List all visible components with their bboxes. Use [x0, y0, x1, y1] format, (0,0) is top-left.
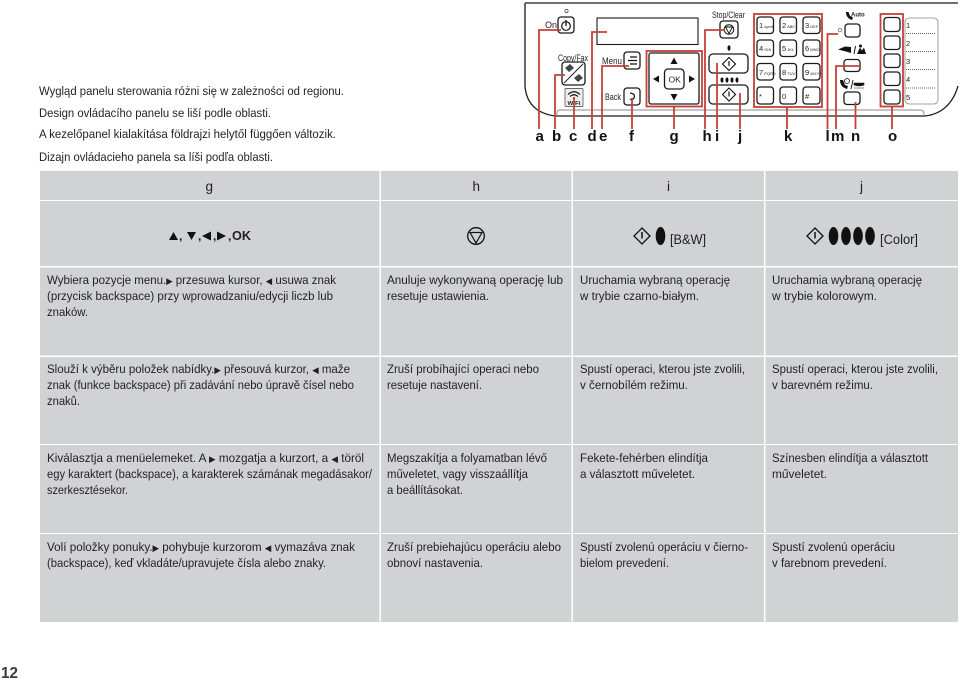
numeric keypad: 0: [782, 92, 786, 101]
Slovak descriptions: Spustí zvolenú operáciu v čierno-: [580, 540, 748, 554]
one-touch buttons and list: 4: [906, 75, 910, 84]
callout letters: c: [569, 128, 577, 145]
callout letters: i: [715, 128, 719, 145]
Hungarian descriptions: Színesben elindítja a választott: [772, 451, 929, 465]
wifi icon: WiFi: [568, 101, 581, 107]
control panel diagram: [525, 3, 958, 145]
numeric keypad: #: [805, 92, 810, 101]
Polish descriptions: Uruchamia wybraną operację: [772, 273, 922, 287]
red callout lines: [539, 14, 903, 129]
Polish descriptions: w trybie kolorowym.: [771, 289, 877, 303]
Slovak descriptions: (backspace), keď vkladáte/upravujete čísla alebo znaky.: [47, 556, 326, 570]
wifi icon: [565, 88, 583, 107]
numeric keypad: 4 GHI: [759, 44, 771, 53]
intro text: regional panel note: Wygląd panelu sterowania różni się w zależności od regionu.: [39, 84, 344, 98]
symbols: navigation keys: OK: [232, 228, 252, 243]
numeric keypad: 2 ABC: [782, 21, 795, 30]
numeric keypad: 6 MNO: [805, 44, 820, 53]
Polish descriptions: znaków.: [47, 305, 88, 319]
Polish descriptions: (przycisk backspace) przy wprowadzaniu/edycji liczb lub: [47, 289, 333, 303]
numeric keypad: *: [759, 92, 762, 101]
stop/clear button: [712, 10, 745, 38]
symbol: start color: [Color]: [880, 232, 918, 247]
callout letters: n: [851, 128, 860, 145]
numeric keypad: 3 DEF: [805, 21, 819, 30]
Slovak descriptions: obnoví nastavenia.: [387, 556, 483, 570]
start color button: [709, 77, 748, 104]
Czech descriptions: v černobílém režimu.: [580, 378, 688, 392]
numeric keypad: 1 symb: [759, 21, 775, 30]
Czech descriptions: resetuje nastavení.: [387, 378, 482, 392]
navigation pad: [649, 53, 699, 104]
Czech descriptions: v barevném režimu.: [772, 378, 873, 392]
Czech descriptions: Zruší probíhající operaci nebo: [387, 362, 539, 376]
callout letters: l: [826, 128, 830, 145]
callout letters: e: [599, 128, 607, 145]
callout letters: a: [536, 128, 544, 145]
Czech descriptions: Slouží k výběru položek nabídky.▶ přesouvá kurzor, ◀ maže: [47, 362, 350, 376]
table column headings: j: [859, 179, 863, 194]
Czech descriptions: znak (funkce backspace) při zadávání nebo úpravě čísel nebo: [47, 378, 354, 392]
numeric keypad: 9 WXYZ: [805, 68, 822, 77]
numeric keypad: 7 PQRS: [759, 68, 776, 77]
table column headings: i: [667, 179, 670, 194]
back button: Back: [605, 92, 621, 102]
one-touch buttons and list: 1: [906, 21, 910, 30]
symbols: navigation keys: [169, 228, 252, 243]
callout letters: h: [702, 128, 712, 145]
numeric keypad: 8 TUV: [782, 68, 796, 77]
menu button: [602, 52, 640, 69]
numeric keypad: 5 JKL: [782, 44, 795, 53]
intro text: regional panel note: [39, 84, 344, 164]
Hungarian descriptions: Fekete-fehérben elindítja: [580, 451, 708, 465]
back button: [605, 88, 640, 105]
auto answer button: Auto: [851, 12, 865, 18]
one-touch buttons and list: 2: [906, 39, 910, 48]
panel outline: [525, 3, 958, 116]
table column headings: g: [206, 179, 213, 194]
callout letters: d: [588, 128, 597, 145]
symbol: start B&W: [B&W]: [670, 232, 706, 247]
Hungarian descriptions: szerkesztésekor.: [47, 483, 128, 497]
fax/contacts button: [838, 44, 866, 72]
callout letters: m: [831, 128, 844, 145]
symbol: stop: [468, 228, 484, 244]
panel inner ledge: [557, 110, 924, 115]
Polish descriptions: w trybie czarno-białym.: [579, 289, 699, 303]
Hungarian descriptions: Kiválasztja a menüelemeket. A ▶ mozgatja a kurzort, a ◀ töröl: [47, 451, 364, 465]
Slovak descriptions: bielom prevedení.: [580, 556, 669, 570]
Slovak descriptions: Spustí zvolenú operáciu: [772, 540, 895, 554]
stop/clear button: Stop/Clear: [712, 10, 745, 20]
table column headings: [206, 179, 863, 194]
Hungarian descriptions: Megszakítja a folyamatban lévő: [387, 451, 547, 465]
callout letters: b: [552, 128, 561, 145]
intro text: regional panel note: Dizajn ovládacieho panela sa líši podľa oblasti.: [39, 150, 273, 164]
Hungarian descriptions: [47, 451, 929, 497]
Slovak descriptions: Zruší prebiehajúcu operáciu alebo: [387, 540, 561, 554]
Polish descriptions: [47, 273, 922, 319]
Polish descriptions: resetuje ustawienia.: [387, 289, 489, 303]
auto answer button: [838, 12, 865, 37]
symbol: start color: [807, 227, 918, 247]
Slovak descriptions: v farebnom prevedení.: [772, 556, 887, 570]
symbol: start B&W: [634, 227, 706, 247]
navigation pad: OK: [668, 74, 681, 84]
table background: [40, 171, 958, 622]
symbols: navigation keys: ,,,,: [179, 229, 231, 243]
numeric keypad: [757, 17, 822, 104]
copy/fax button: Copy/Fax: [558, 53, 588, 63]
display: [597, 18, 698, 44]
copy/fax button: [558, 53, 588, 85]
start B&W button: [709, 45, 748, 73]
Hungarian descriptions: a beállításokat.: [387, 483, 463, 497]
table column headings: h: [472, 179, 480, 194]
redial/hook button: [840, 78, 864, 104]
callout letters: j: [737, 128, 742, 145]
Czech descriptions: Spustí operaci, kterou jste zvolili,: [580, 362, 745, 376]
Polish descriptions: Wybiera pozycje menu.▶ przesuwa kursor, ◀ usuwa znak: [47, 273, 337, 287]
intro text: regional panel note: Design ovládacího panelu se liší podle oblasti.: [39, 106, 271, 120]
Hungarian descriptions: egy karaktert (backspace), a karakterek számának megadásakor/: [47, 467, 372, 481]
Polish descriptions: Anuluje wykonywaną operację lub: [387, 273, 563, 287]
one-touch buttons and list: [884, 18, 938, 104]
Czech descriptions: [47, 362, 938, 408]
power button: [545, 9, 574, 33]
Czech descriptions: znaků.: [47, 394, 80, 408]
Slovak descriptions: Volí položky ponuky.▶ pohybuje kurzorom ◀ vymazáva znak: [47, 540, 356, 554]
power button: On: [545, 20, 557, 30]
one-touch buttons and list: 3: [906, 57, 910, 66]
menu button: Menu: [602, 56, 622, 66]
callout letters: k: [784, 128, 793, 145]
one-touch buttons and list: 5: [906, 93, 910, 102]
callout letters: g: [670, 128, 679, 145]
Czech descriptions: Spustí operaci, kterou jste zvolili,: [772, 362, 938, 376]
callout letters: [536, 128, 897, 145]
Hungarian descriptions: műveletet, vagy visszaállítja: [387, 467, 528, 481]
Hungarian descriptions: a választott műveletet.: [580, 467, 695, 481]
callout letters: f: [629, 128, 635, 145]
Slovak descriptions: [47, 540, 895, 570]
Polish descriptions: Uruchamia wybraną operację: [580, 273, 730, 287]
intro text: regional panel note: A kezelőpanel kialakítása földrajzi helytől függően változik.: [39, 127, 336, 141]
callout letters: o: [888, 128, 897, 145]
Hungarian descriptions: műveletet.: [772, 467, 827, 481]
